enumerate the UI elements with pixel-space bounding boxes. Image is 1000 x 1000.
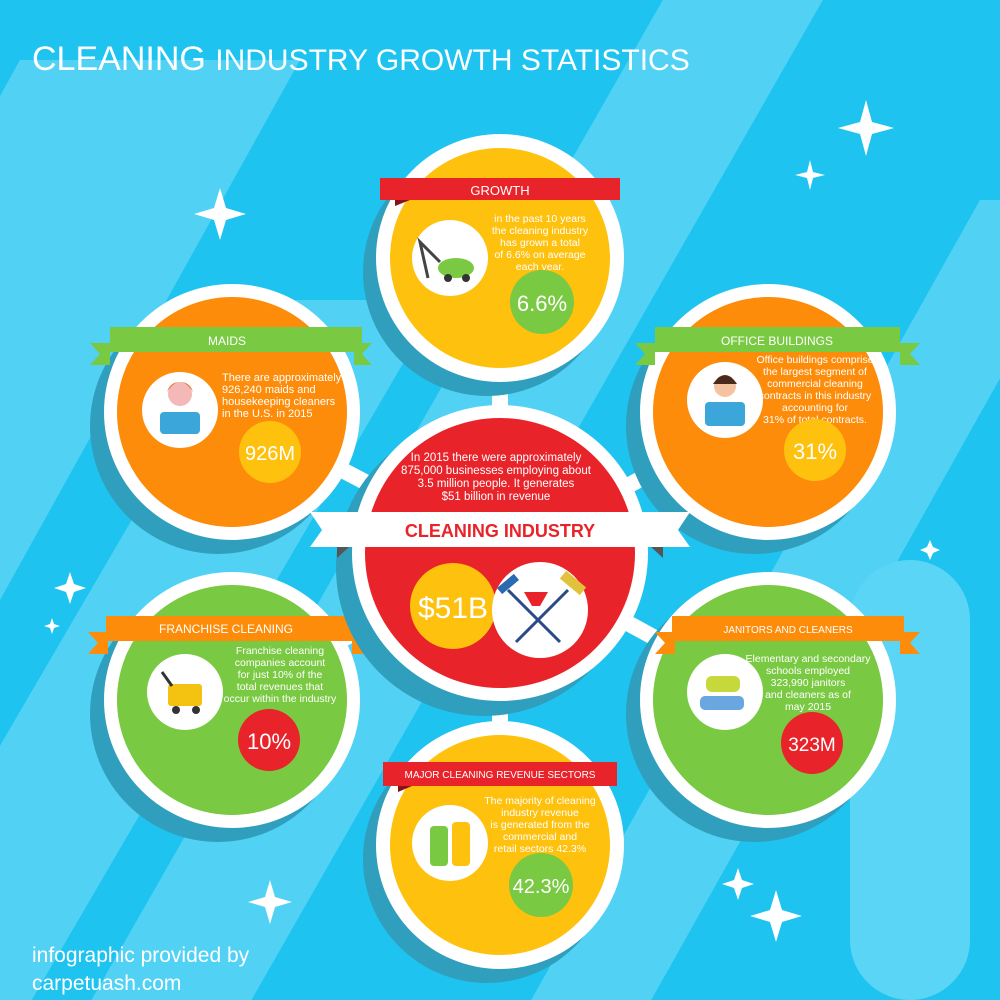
text: major: is generated from the	[490, 819, 590, 831]
text: major: commercial and	[503, 831, 577, 843]
ribbon: major: MAJOR CLEANING REVENUE SECTORS	[405, 770, 596, 781]
text: maids: housekeeping cleaners	[222, 396, 336, 408]
stat: 323M	[781, 712, 843, 774]
stat: 42.3%: 42.3%	[513, 876, 570, 898]
text: center: In 2015 there were approximately	[411, 452, 582, 464]
icon: sparkles	[44, 100, 940, 942]
ribbon: growth: GROWTH	[470, 183, 530, 198]
text: center: 875,000 businesses employing about	[401, 465, 592, 477]
panel: franchise cleaning	[88, 572, 372, 842]
text: janitors: 323,990 janitors	[771, 677, 845, 689]
text: maids	[222, 372, 342, 420]
icon: sponge brush	[687, 654, 763, 730]
icon: vacuum	[412, 220, 488, 296]
title: CLEANING INDUSTRY GROWTH STATISTICS	[32, 40, 690, 78]
text: office: the largest segment of	[763, 366, 867, 378]
text: office: contracts in this industry	[759, 390, 872, 402]
panel: janitors and cleaners	[626, 572, 920, 842]
text: janitors	[746, 653, 871, 713]
text: office: Office buildings comprise	[756, 354, 874, 366]
ribbon: office: OFFICE BUILDINGS	[721, 334, 833, 348]
panel: maids	[90, 284, 372, 554]
text: major: industry revenue	[501, 807, 579, 819]
stat: 31%: 31%	[793, 439, 837, 464]
text: center	[401, 452, 592, 503]
ribbon: cleaning industry	[310, 512, 690, 558]
stat: 926M: 926M	[245, 443, 295, 465]
text: franchise: occur within the industry	[224, 693, 337, 705]
panel: office buildings	[626, 284, 920, 554]
footer credit	[32, 944, 250, 995]
text: franchise: Franchise cleaning	[236, 645, 324, 657]
text: major: retail sectors 42.3%	[494, 843, 586, 855]
ribbon: janitors	[655, 616, 920, 654]
stat: 323M: 323M	[788, 735, 836, 756]
text: janitors: Elementary and secondary	[746, 653, 871, 665]
ribbon: cleaning industry: CLEANING INDUSTRY	[405, 521, 595, 541]
ribbon: growth	[380, 178, 620, 206]
text: major: The majority of cleaning	[484, 795, 596, 807]
ribbon: office	[635, 327, 920, 365]
text: growth: in the past 10 years	[494, 213, 586, 225]
connectors	[232, 258, 768, 845]
panel: major cleaning revenue sectors	[363, 721, 624, 983]
text: maids: There are approximately	[222, 372, 342, 384]
text: major	[484, 795, 596, 855]
ribbon: janitors: JANITORS AND CLEANERS	[723, 625, 853, 636]
text: janitors: may 2015	[785, 701, 831, 713]
text: office	[756, 354, 874, 426]
text: maids: in the U.S. in 2015	[222, 408, 313, 420]
stat: 42.3%	[509, 853, 573, 917]
icon: floor scrubber	[147, 654, 223, 730]
stat: 6.6%: 6.6%	[517, 291, 567, 316]
text: growth	[492, 213, 589, 273]
stat: 6.6%	[510, 270, 574, 334]
text: center: $51 billion in revenue	[442, 491, 550, 503]
panel: cleaning industry center	[310, 405, 690, 716]
icon: maid	[142, 372, 218, 448]
icon: office worker	[687, 362, 763, 438]
footer credit: infographic provided by	[32, 944, 250, 967]
ribbon: franchise: FRANCHISE CLEANING	[159, 622, 293, 636]
stat: $51B: $51B	[418, 592, 488, 625]
text: janitors: and cleaners as of	[765, 689, 851, 701]
text: maids: 926,240 maids and	[222, 384, 316, 396]
stat: 10%	[238, 709, 300, 771]
ribbon: maids: MAIDS	[208, 334, 246, 348]
text: office: 31% of total contracts.	[763, 414, 867, 426]
text: growth: has grown a total	[500, 237, 580, 249]
text: janitors: schools employed	[766, 665, 850, 677]
stat: 926M	[239, 421, 301, 483]
ribbon: maids	[90, 327, 372, 365]
text: center: 3.5 million people. It generates	[418, 478, 575, 490]
text: franchise: for just 10% of the	[238, 669, 322, 681]
text: office: accounting for	[782, 402, 848, 414]
panel: growth	[363, 134, 624, 396]
ribbon: major	[383, 762, 617, 792]
text: franchise: total revenues that	[237, 681, 323, 693]
text: growth: each year.	[516, 261, 564, 273]
stat: $51B	[410, 563, 496, 649]
stat: 31%	[784, 419, 846, 481]
text: office: commercial cleaning	[767, 378, 863, 390]
text: franchise: companies account	[235, 657, 325, 669]
icon: brooms	[492, 562, 588, 658]
text: growth: the cleaning industry	[492, 225, 589, 237]
icon: bottles	[412, 805, 488, 881]
ribbon: franchise	[88, 616, 372, 654]
text: franchise	[224, 645, 337, 705]
text: growth: of 6.6% on average	[494, 249, 586, 261]
stat: 10%: 10%	[247, 729, 291, 754]
footer credit: carpetuash.com	[32, 972, 181, 995]
